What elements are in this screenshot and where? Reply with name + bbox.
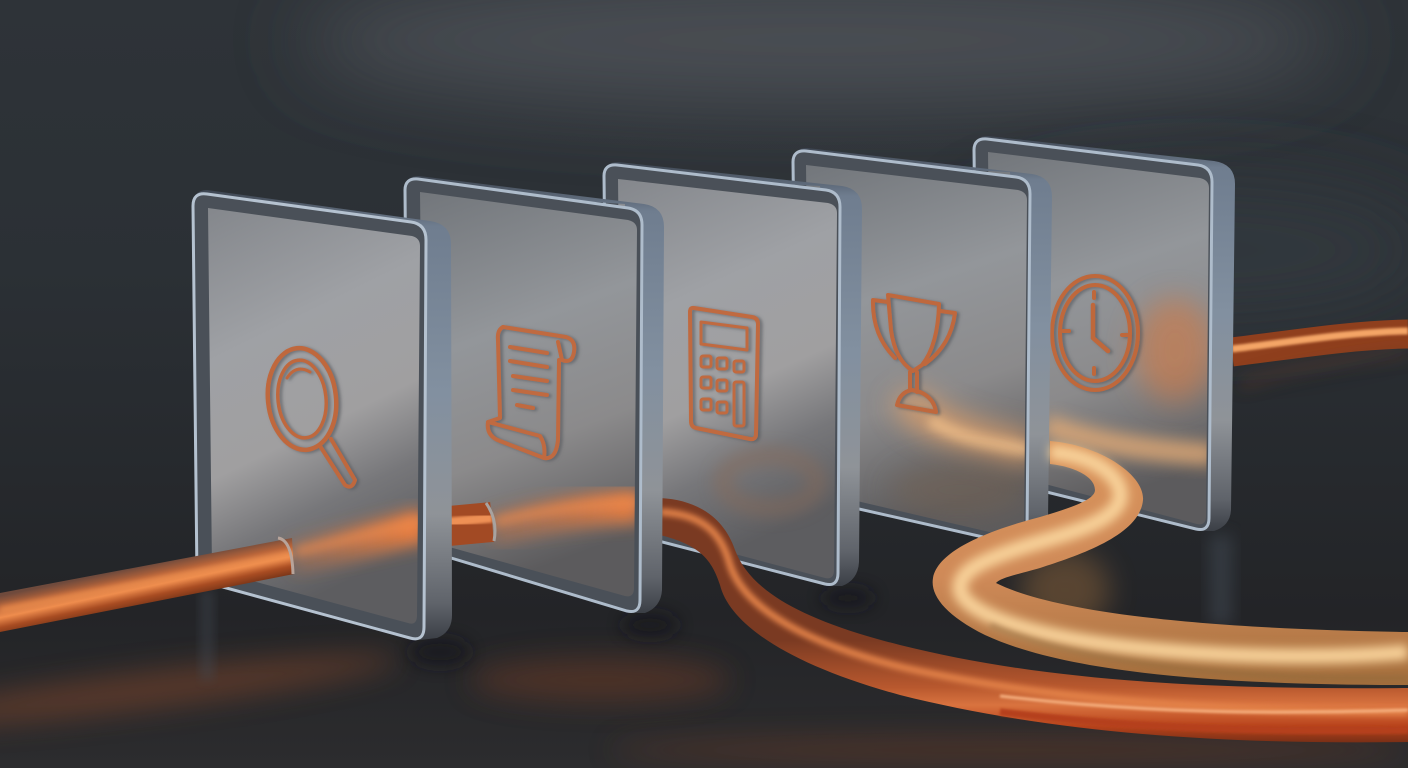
icon: trophy	[873, 295, 955, 412]
copper tube: segment between panels 1 and 2	[449, 503, 495, 541]
glow: ring reflection on glass	[722, 456, 818, 508]
glow: orange haze around clock	[1135, 298, 1215, 402]
icon: calculator	[690, 308, 758, 439]
panel 4: trophy	[793, 148, 1052, 546]
panel 2: scroll	[405, 176, 664, 613]
icon: magnifying glass	[263, 345, 355, 487]
copper tube: entry from left edge	[0, 538, 294, 632]
glow: tube light sweep	[905, 395, 1035, 452]
glow: tube light inside panel 1	[290, 525, 425, 558]
panel 3: calculator	[604, 162, 862, 586]
copper tube: lower long curve	[660, 498, 1408, 742]
panel 1: magnifying glass	[193, 190, 452, 640]
copper tube: far right segment	[1232, 331, 1408, 385]
glow: tube reflection band	[1045, 425, 1215, 455]
panel 5: clock	[974, 136, 1235, 531]
icon: clock	[1052, 276, 1138, 390]
icon: scroll	[488, 327, 574, 458]
copper tube: upper glowing S-curve	[933, 441, 1408, 685]
glow: tube light inside panel 2	[490, 506, 640, 530]
